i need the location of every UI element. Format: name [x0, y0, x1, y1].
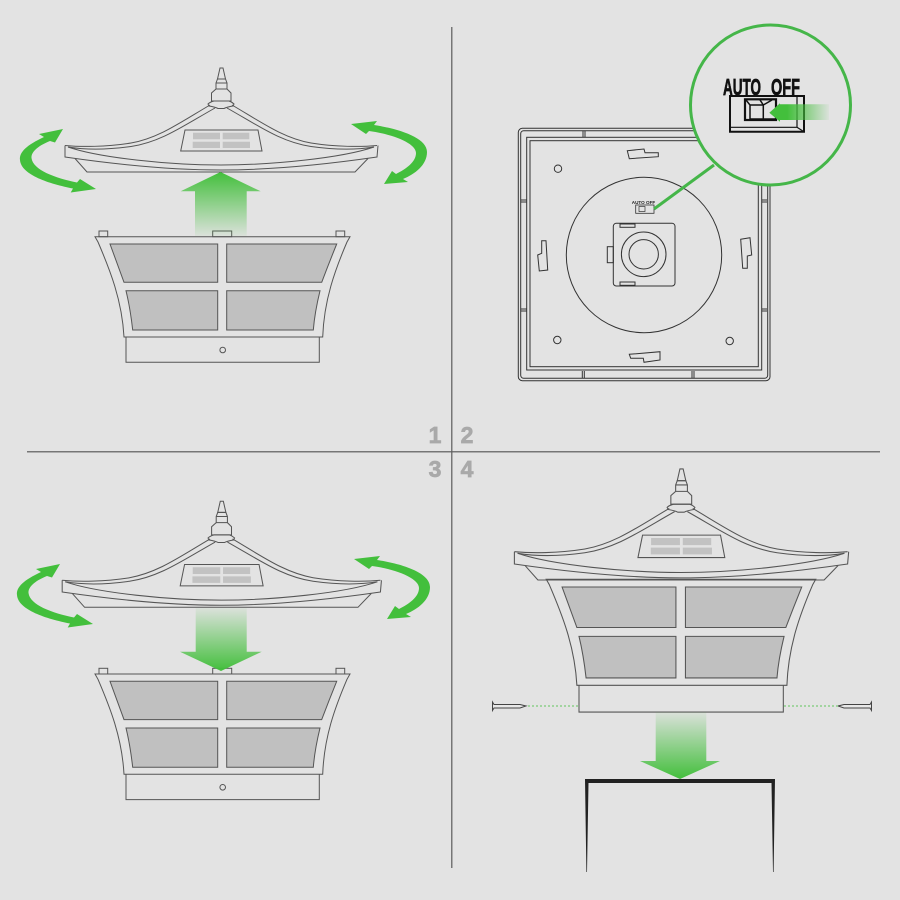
arrow: lift up	[181, 172, 261, 236]
step numbers	[429, 422, 474, 482]
left screw	[492, 702, 526, 710]
panel: step 4 mount on post	[492, 469, 872, 872]
small switch	[632, 200, 655, 213]
arrow: twist right	[354, 556, 430, 619]
roof	[65, 68, 378, 172]
roof	[514, 469, 849, 580]
lantern body	[95, 231, 350, 362]
roof underside	[518, 128, 770, 381]
magnifier circle	[690, 25, 850, 185]
vertical divider	[451, 27, 452, 868]
arrow: lower onto post	[640, 712, 720, 779]
post	[585, 779, 775, 872]
panel: step 2 switch	[518, 25, 850, 381]
right dotted guide	[784, 705, 838, 707]
panel: step 3 replace roof	[17, 501, 430, 800]
lantern body	[95, 668, 350, 800]
number 3: 3	[429, 456, 441, 482]
roof	[62, 501, 381, 607]
label: AUTO OFF: OFF	[771, 74, 800, 100]
lantern body	[546, 579, 816, 712]
number 2: 2	[461, 422, 473, 448]
leader line	[654, 165, 714, 209]
label: AUTO OFF: AUTO	[723, 74, 761, 100]
horizontal divider	[27, 451, 880, 452]
arrow: twist left	[20, 129, 96, 192]
left dotted guide	[528, 705, 579, 707]
panel: step 1 remove roof	[20, 68, 427, 362]
right screw	[838, 702, 872, 710]
number 4: 4	[461, 456, 474, 482]
enlarged switch	[730, 96, 804, 132]
arrow: press down	[180, 608, 262, 671]
arrow: twist left	[17, 564, 93, 628]
number 1: 1	[429, 422, 442, 448]
arrow: twist right	[351, 121, 427, 184]
small switch: AUTO OFF	[632, 200, 655, 205]
arrow: points to switch	[769, 103, 829, 122]
